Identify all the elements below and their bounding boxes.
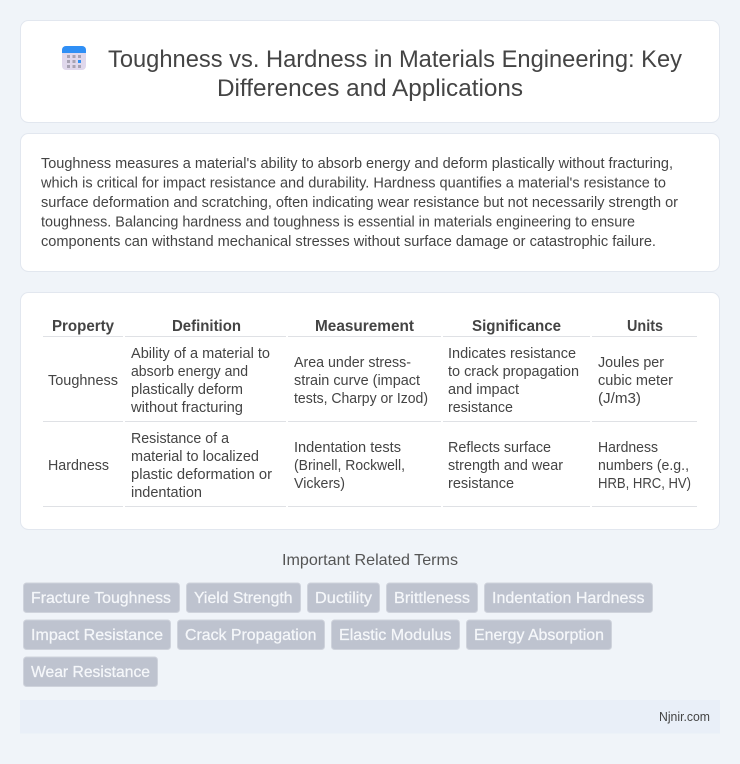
tag list: related terms: Impact Resistance [31,627,163,644]
tag list: related terms [24,583,652,686]
table row: hardness [43,431,697,507]
tag list: related terms: Crack Propagation [185,627,316,644]
table row: hardness: (Brinell, Rockwell, [294,458,405,474]
table row: toughness: to crack propagation [448,364,579,380]
panel: introduction text: components can withstand mechanical stresses without surface damage or catastrophic failure. [41,234,656,250]
table row: hardness: Reflects surface [448,440,551,456]
title: Differences and Applications [217,75,523,102]
table header row: Definition [172,318,241,335]
table row: toughness: resistance [448,400,513,416]
table row: hardness: plastic deformation or [131,467,272,483]
table header row: Significance [472,318,561,335]
title [108,46,682,102]
tag list: related terms: Brittleness [394,590,470,607]
tag list: related terms: Elastic Modulus [339,627,452,644]
table row: hardness: Resistance of a [131,431,229,447]
tag list: related terms: Indentation Hardness [492,590,644,607]
tag list: related terms: Ductility [315,590,372,607]
table row: hardness: Indentation tests [294,440,401,456]
table row: toughness: without fracturing [130,400,243,416]
footer: Njnir.com [659,709,710,724]
table row: toughness: Ability of a material to [131,346,270,362]
table row: hardness: numbers (e.g., [598,458,689,474]
panel: introduction text: surface deformation and scratching, often indicating wear resistance but not necessarily strength or [41,195,678,211]
table row: toughness: (J/m3) [598,391,641,407]
icon: calendar [62,46,86,70]
table row: toughness: cubic meter [598,373,673,389]
table header row: Units [627,318,663,335]
panel: introduction text [20,134,720,272]
table row: toughness [43,346,697,422]
table row: toughness: Indicates resistance [448,346,576,362]
tag list: related terms: Fracture Toughness [31,590,171,607]
panel: comparison table [20,292,720,530]
panel: introduction text: which is critical for impact resistance and durability. Hardness quantifies a material's resistance to [40,176,666,192]
table row: toughness: and impact [448,382,519,398]
table row: hardness: indentation [131,485,202,501]
table row: toughness: plastically deform [131,382,243,398]
table row: hardness: resistance [448,476,514,492]
table row: toughness: Joules per [598,355,664,371]
table row: hardness: HRB, HRC, HV) [598,476,691,492]
panel: introduction text: toughness. Balancing hardness and toughness is essential in materials engineering to ensure [41,214,635,230]
table header row [43,318,697,337]
title: Toughness vs. Hardness in Materials Engineering: Key [108,46,682,73]
panel: introduction text: Toughness measures a material's ability to absorb energy and deform plastically without fracturing, [41,156,673,172]
table row: hardness: Vickers) [294,476,345,492]
table header row: Measurement [315,318,415,335]
table row: hardness: Hardness [48,458,109,474]
table row: hardness: Hardness [598,440,658,456]
tag list: related terms: Energy Absorption [474,627,604,644]
table row: hardness: strength and wear [448,458,563,474]
table row: toughness: absorb energy and [131,364,248,380]
table row: toughness: tests, Charpy or Izod) [294,391,428,407]
table row: toughness: Area under stress- [294,355,411,371]
table header row: Property [52,318,114,335]
tag list: related terms: Yield Strength [194,590,292,607]
footer [20,700,720,734]
table row: hardness: material to localized [131,449,259,465]
table row: toughness: strain curve (impact [294,373,420,389]
tag list: related terms: Wear Resistance [31,664,150,681]
panel: header [20,20,720,122]
heading: related terms: Important Related Terms [282,552,458,569]
table row: toughness: Toughness [48,373,118,389]
